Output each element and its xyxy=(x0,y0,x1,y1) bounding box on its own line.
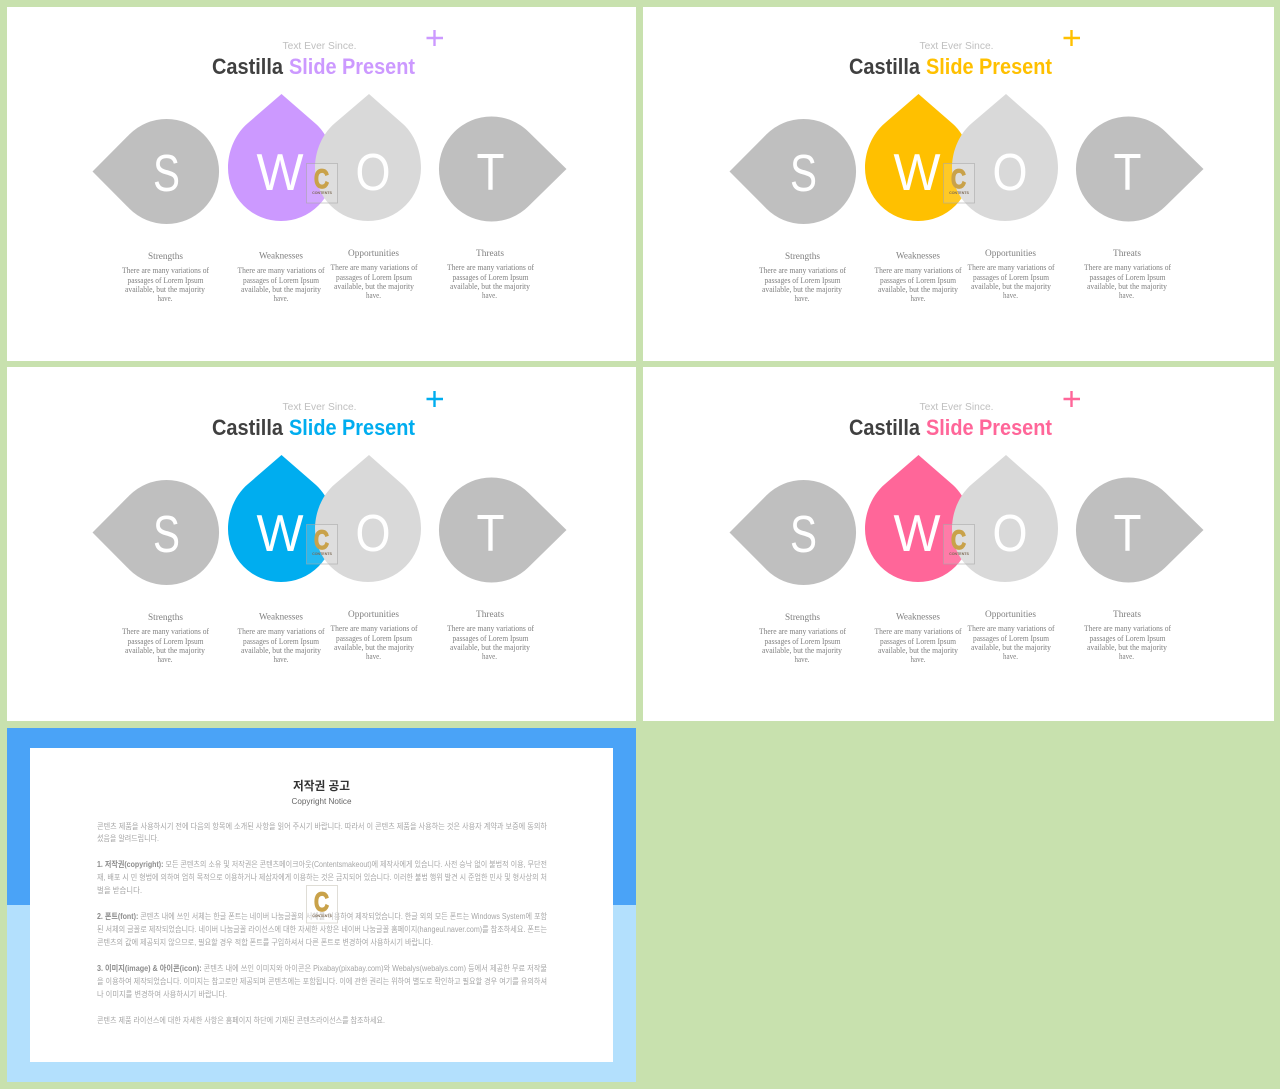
text: opportunities: There are many variations of xyxy=(330,623,418,633)
logo watermark: CONTENTS xyxy=(949,191,969,195)
text: weaknesses: available, but the majority xyxy=(878,645,959,655)
panel: copyright notice xyxy=(7,728,636,1082)
text: threats: There are many variations of xyxy=(1084,262,1171,272)
text: opportunities: have. xyxy=(366,651,381,661)
text: weaknesses: have. xyxy=(910,293,926,303)
text: weaknesses: There are many variations of xyxy=(238,626,325,636)
text: image clause: 을 이용하여 제작되었습니다. 이미지는 참고로만 제공되며 콘텐츠에는 포함됩니다. 이에 관한 권리는 위하여 별도로 확인하고 필요할 경우 여기를 유의하셔 xyxy=(97,976,547,986)
text: weaknesses xyxy=(874,252,962,303)
icon: plus xyxy=(426,391,443,407)
text: font clause: 콘텐츠의 값에 제공되지 않으므로, 필요할 경우 적합 폰트를 구입하셔서 다른 폰트로 변경하여 사용하시기 바랍니다. xyxy=(97,937,433,947)
drop: opportunities xyxy=(952,94,1058,221)
panel: pink SWOT slide xyxy=(643,367,1274,721)
text: opportunities: have. xyxy=(1003,651,1018,661)
drop: strengths xyxy=(730,480,856,585)
drop: strengths: S xyxy=(790,145,817,203)
drop: strengths xyxy=(92,480,219,585)
title: Castilla xyxy=(849,54,920,79)
text: threats: passages of Lorem Ipsum xyxy=(452,633,529,643)
text: threats: Threats xyxy=(1113,249,1141,259)
text: opportunities xyxy=(330,610,418,661)
text: weaknesses xyxy=(238,612,325,664)
text: image clause: 3. 이미지(image) & 아이콘(icon): 콘텐츠 내에 쓰인 이미지와 아이콘은 Pixabay(pixabay.com)와 Webalys(webalys.com) 등에서 제공한 무료 저작물 xyxy=(97,963,547,973)
panel: purple SWOT slide xyxy=(7,7,636,361)
text: threats: There are many variations of xyxy=(447,623,534,633)
text: weaknesses: have. xyxy=(274,654,288,664)
text: strengths: have. xyxy=(794,293,810,303)
text: opportunities: passages of Lorem Ipsum xyxy=(336,633,412,643)
text: opportunities: available, but the majority xyxy=(971,281,1052,291)
drop: threats xyxy=(1076,116,1204,222)
text: font clause: 2. 폰트(font): 콘텐츠 내에 쓰인 서체는 한글 폰트는 네이버 나눔글꼴의 서체를 이용하여 제작되었습니다. 한글 외의 모든 폰트는 Windows System에 포함 xyxy=(97,911,548,921)
text: strengths: have. xyxy=(794,654,810,664)
text: opportunities: have. xyxy=(366,290,381,300)
drop: threats: T xyxy=(1114,144,1142,202)
text: strengths: passages of Lorem Ipsum xyxy=(764,275,841,285)
text: font clause xyxy=(97,911,548,947)
drop: opportunities: O xyxy=(992,144,1028,202)
text: weaknesses: Weaknesses xyxy=(896,252,940,262)
text: threats: have. xyxy=(1119,651,1134,661)
text: opportunities: There are many variations of xyxy=(330,262,418,272)
title: Slide Present xyxy=(289,54,415,79)
text: strengths: available, but the majority xyxy=(762,284,843,294)
text: strengths: Strengths xyxy=(148,252,183,262)
drop: threats xyxy=(1076,478,1204,582)
text: opportunities: have. xyxy=(1003,290,1018,300)
text: threats: passages of Lorem Ipsum xyxy=(452,272,529,282)
text: strengths: Strengths xyxy=(785,252,820,262)
text: opportunities: Opportunities xyxy=(985,249,1036,259)
text: strengths xyxy=(122,252,209,303)
drop: opportunities: O xyxy=(356,505,390,563)
drop: threats: T xyxy=(476,505,504,563)
text: threats: have. xyxy=(1119,290,1134,300)
text: intro: 콘텐츠 제품을 사용하시기 전에 다음의 항목에 소개된 사항을 읽어 주시기 바랍니다. 따라서 이 콘텐츠 제품을 사용하는 것은 사용자 계약과 보증에 동의하 xyxy=(97,821,548,831)
text: weaknesses: passages of Lorem Ipsum xyxy=(880,275,956,285)
title: Slide Present xyxy=(926,54,1052,79)
logo watermark xyxy=(306,524,338,564)
text: opportunities: Opportunities xyxy=(985,610,1036,620)
logo watermark: C xyxy=(951,164,966,194)
text: weaknesses: There are many variations of xyxy=(238,265,325,275)
logo watermark: C xyxy=(951,525,966,555)
text: threats: available, but the majority xyxy=(450,281,531,291)
text: weaknesses: Weaknesses xyxy=(259,252,303,262)
text: opportunities: available, but the majority xyxy=(334,281,415,291)
text: strengths: There are many variations of xyxy=(759,626,846,636)
logo watermark xyxy=(944,524,974,564)
text: copyright clause: 1. 저작권(copyright): 모든 콘텐츠의 소유 및 저작권은 콘텐츠메이크아웃(Contentsmakeout)에 제작사에게 있습니다. 사전 승낙 없이 불법적 이용, 무단전 xyxy=(97,859,547,869)
text: opportunities: passages of Lorem Ipsum xyxy=(973,633,1049,643)
drop: strengths: S xyxy=(790,506,817,564)
text: weaknesses: passages of Lorem Ipsum xyxy=(880,636,956,646)
text: weaknesses: Weaknesses xyxy=(259,612,303,622)
logo watermark: CONTENTS xyxy=(312,191,332,195)
text: threats xyxy=(447,249,534,300)
text: threats: available, but the majority xyxy=(450,642,531,652)
icon: plus xyxy=(1064,391,1080,407)
drop: weaknesses: W xyxy=(894,144,940,202)
text: strengths xyxy=(759,613,846,664)
text: weaknesses: There are many variations of xyxy=(874,626,962,636)
logo watermark xyxy=(306,886,338,923)
text: strengths: There are many variations of xyxy=(759,265,846,275)
text: strengths: passages of Lorem Ipsum xyxy=(764,636,841,646)
text: opportunities: Opportunities xyxy=(348,249,399,259)
panel: yellow SWOT slide xyxy=(643,7,1274,361)
drop: threats: T xyxy=(1114,505,1142,563)
text: strengths: have. xyxy=(158,293,172,303)
panel: blue SWOT slide xyxy=(7,367,636,721)
text: threats: available, but the majority xyxy=(1087,642,1168,652)
icon: plus xyxy=(1064,30,1080,46)
text: opportunities: There are many variations of xyxy=(968,262,1055,272)
drop: strengths xyxy=(92,119,219,224)
text: opportunities: available, but the majority xyxy=(971,642,1052,652)
text: threats: Threats xyxy=(476,610,504,620)
subheading: Copyright Notice xyxy=(292,796,352,806)
text: opportunities: passages of Lorem Ipsum xyxy=(336,272,412,282)
text: threats: Threats xyxy=(476,249,504,259)
text: opportunities xyxy=(330,249,418,300)
logo watermark: CONTENTS xyxy=(312,552,332,556)
text: strengths: available, but the majority xyxy=(125,284,206,294)
text: weaknesses: have. xyxy=(910,654,926,664)
title: Castilla xyxy=(212,415,283,440)
text: opportunities: There are many variations of xyxy=(968,623,1055,633)
subtitle: Text Ever Since. xyxy=(920,401,994,413)
drop: opportunities xyxy=(952,455,1058,582)
text: strengths: Strengths xyxy=(785,613,820,623)
title: Slide Present xyxy=(926,415,1052,440)
text: strengths: passages of Lorem Ipsum xyxy=(128,636,204,646)
text: threats: There are many variations of xyxy=(447,262,534,272)
text: strengths: passages of Lorem Ipsum xyxy=(128,275,204,285)
drop: weaknesses: W xyxy=(256,144,304,202)
text: threats xyxy=(1084,610,1171,661)
subtitle: Text Ever Since. xyxy=(920,40,994,52)
drop: weaknesses xyxy=(865,94,971,221)
text: opportunities: passages of Lorem Ipsum xyxy=(973,272,1049,282)
drop: threats xyxy=(439,116,566,222)
text: strengths xyxy=(759,252,846,303)
text: opportunities: available, but the majority xyxy=(334,642,415,652)
drop: strengths xyxy=(730,119,856,224)
text: intro: 셨음을 알려드립니다. xyxy=(97,833,159,843)
text: weaknesses xyxy=(238,252,325,303)
drop: weaknesses xyxy=(228,94,334,221)
text: font clause: 된 서체의 글꼴로 제작되었습니다. 네이버 나눔글꼴 라이선스에 대한 자세한 사항은 네이버 나눔글꼴 홈페이지(hangeul.naver.com)를 참조하세요. 폰트는 xyxy=(97,924,547,934)
text: copyright clause: 재, 배포 시 민 형법에 의하여 엄히 목적으로 이용하거나 제삼자에게 이용하는 것은 금지되어 있습니다. 이러한 불법 행위 발견 시 준엄한 민사 및 형사상의 처 xyxy=(97,872,547,882)
text: image clause: 나 이미지를 변경하여 사용하시기 바랍니다. xyxy=(97,989,227,999)
heading: copyright notice: 저작권 공고 xyxy=(293,778,350,793)
drop: strengths: S xyxy=(153,506,180,564)
logo watermark: C xyxy=(314,887,329,917)
logo watermark: C xyxy=(314,164,329,194)
text: threats: passages of Lorem Ipsum xyxy=(1090,272,1166,282)
logo watermark: CONTENTS xyxy=(949,552,969,556)
text: threats xyxy=(447,610,534,661)
text: strengths: available, but the majority xyxy=(125,645,206,655)
text: weaknesses xyxy=(874,612,962,664)
text: weaknesses: available, but the majority xyxy=(241,645,322,655)
text: threats: There are many variations of xyxy=(1084,623,1171,633)
text: weaknesses: available, but the majority xyxy=(241,284,322,294)
logo watermark xyxy=(944,164,974,203)
text: intro xyxy=(97,821,548,843)
drop: strengths: S xyxy=(153,145,180,203)
text: strengths: Strengths xyxy=(148,613,183,623)
text: threats: have. xyxy=(482,651,497,661)
text: weaknesses: have. xyxy=(274,293,288,303)
text: threats: have. xyxy=(482,290,497,300)
text: strengths: There are many variations of xyxy=(122,265,209,275)
drop: threats xyxy=(439,478,566,582)
text: weaknesses: passages of Lorem Ipsum xyxy=(243,636,319,646)
drop: opportunities xyxy=(315,455,421,582)
text: opportunities xyxy=(968,249,1055,300)
drop: weaknesses xyxy=(865,455,971,582)
logo watermark: CONTENTS xyxy=(312,914,332,918)
text: opportunities: Opportunities xyxy=(348,610,399,620)
text: strengths xyxy=(122,613,209,664)
logo watermark xyxy=(306,164,338,203)
title: Castilla xyxy=(212,54,283,79)
text: image clause xyxy=(97,963,547,999)
title: Slide Present xyxy=(289,415,415,440)
subtitle: Text Ever Since. xyxy=(282,401,356,413)
drop: weaknesses: W xyxy=(256,505,304,563)
drop: threats: T xyxy=(476,144,504,202)
text: weaknesses: available, but the majority xyxy=(878,284,959,294)
text: strengths: There are many variations of xyxy=(122,626,209,636)
text: opportunities xyxy=(968,610,1055,661)
drop: opportunities: O xyxy=(356,144,390,202)
text: weaknesses: Weaknesses xyxy=(896,612,940,622)
subtitle: Text Ever Since. xyxy=(282,40,356,52)
text: threats: passages of Lorem Ipsum xyxy=(1090,633,1166,643)
drop: weaknesses xyxy=(228,455,334,582)
text: threats: Threats xyxy=(1113,610,1141,620)
drop: opportunities: O xyxy=(992,505,1028,563)
text: copyright clause: 벌을 받습니다. xyxy=(97,885,142,895)
drop: opportunities xyxy=(315,94,421,221)
text: weaknesses: passages of Lorem Ipsum xyxy=(243,275,319,285)
icon: plus xyxy=(426,30,443,46)
text: strengths: available, but the majority xyxy=(762,645,843,655)
text: copyright clause xyxy=(97,859,547,895)
text: license note: 콘텐츠 제품 라이선스에 대한 자세한 사항은 홈페이지 하단에 기재된 콘텐츠라이선스를 참조하세요. xyxy=(97,1015,385,1025)
text: weaknesses: There are many variations of xyxy=(874,265,962,275)
drop: weaknesses: W xyxy=(894,505,940,563)
text: strengths: have. xyxy=(158,654,172,664)
text: threats: available, but the majority xyxy=(1087,281,1168,291)
logo watermark: C xyxy=(314,525,329,555)
text: threats xyxy=(1084,249,1171,300)
title: Castilla xyxy=(849,415,920,440)
